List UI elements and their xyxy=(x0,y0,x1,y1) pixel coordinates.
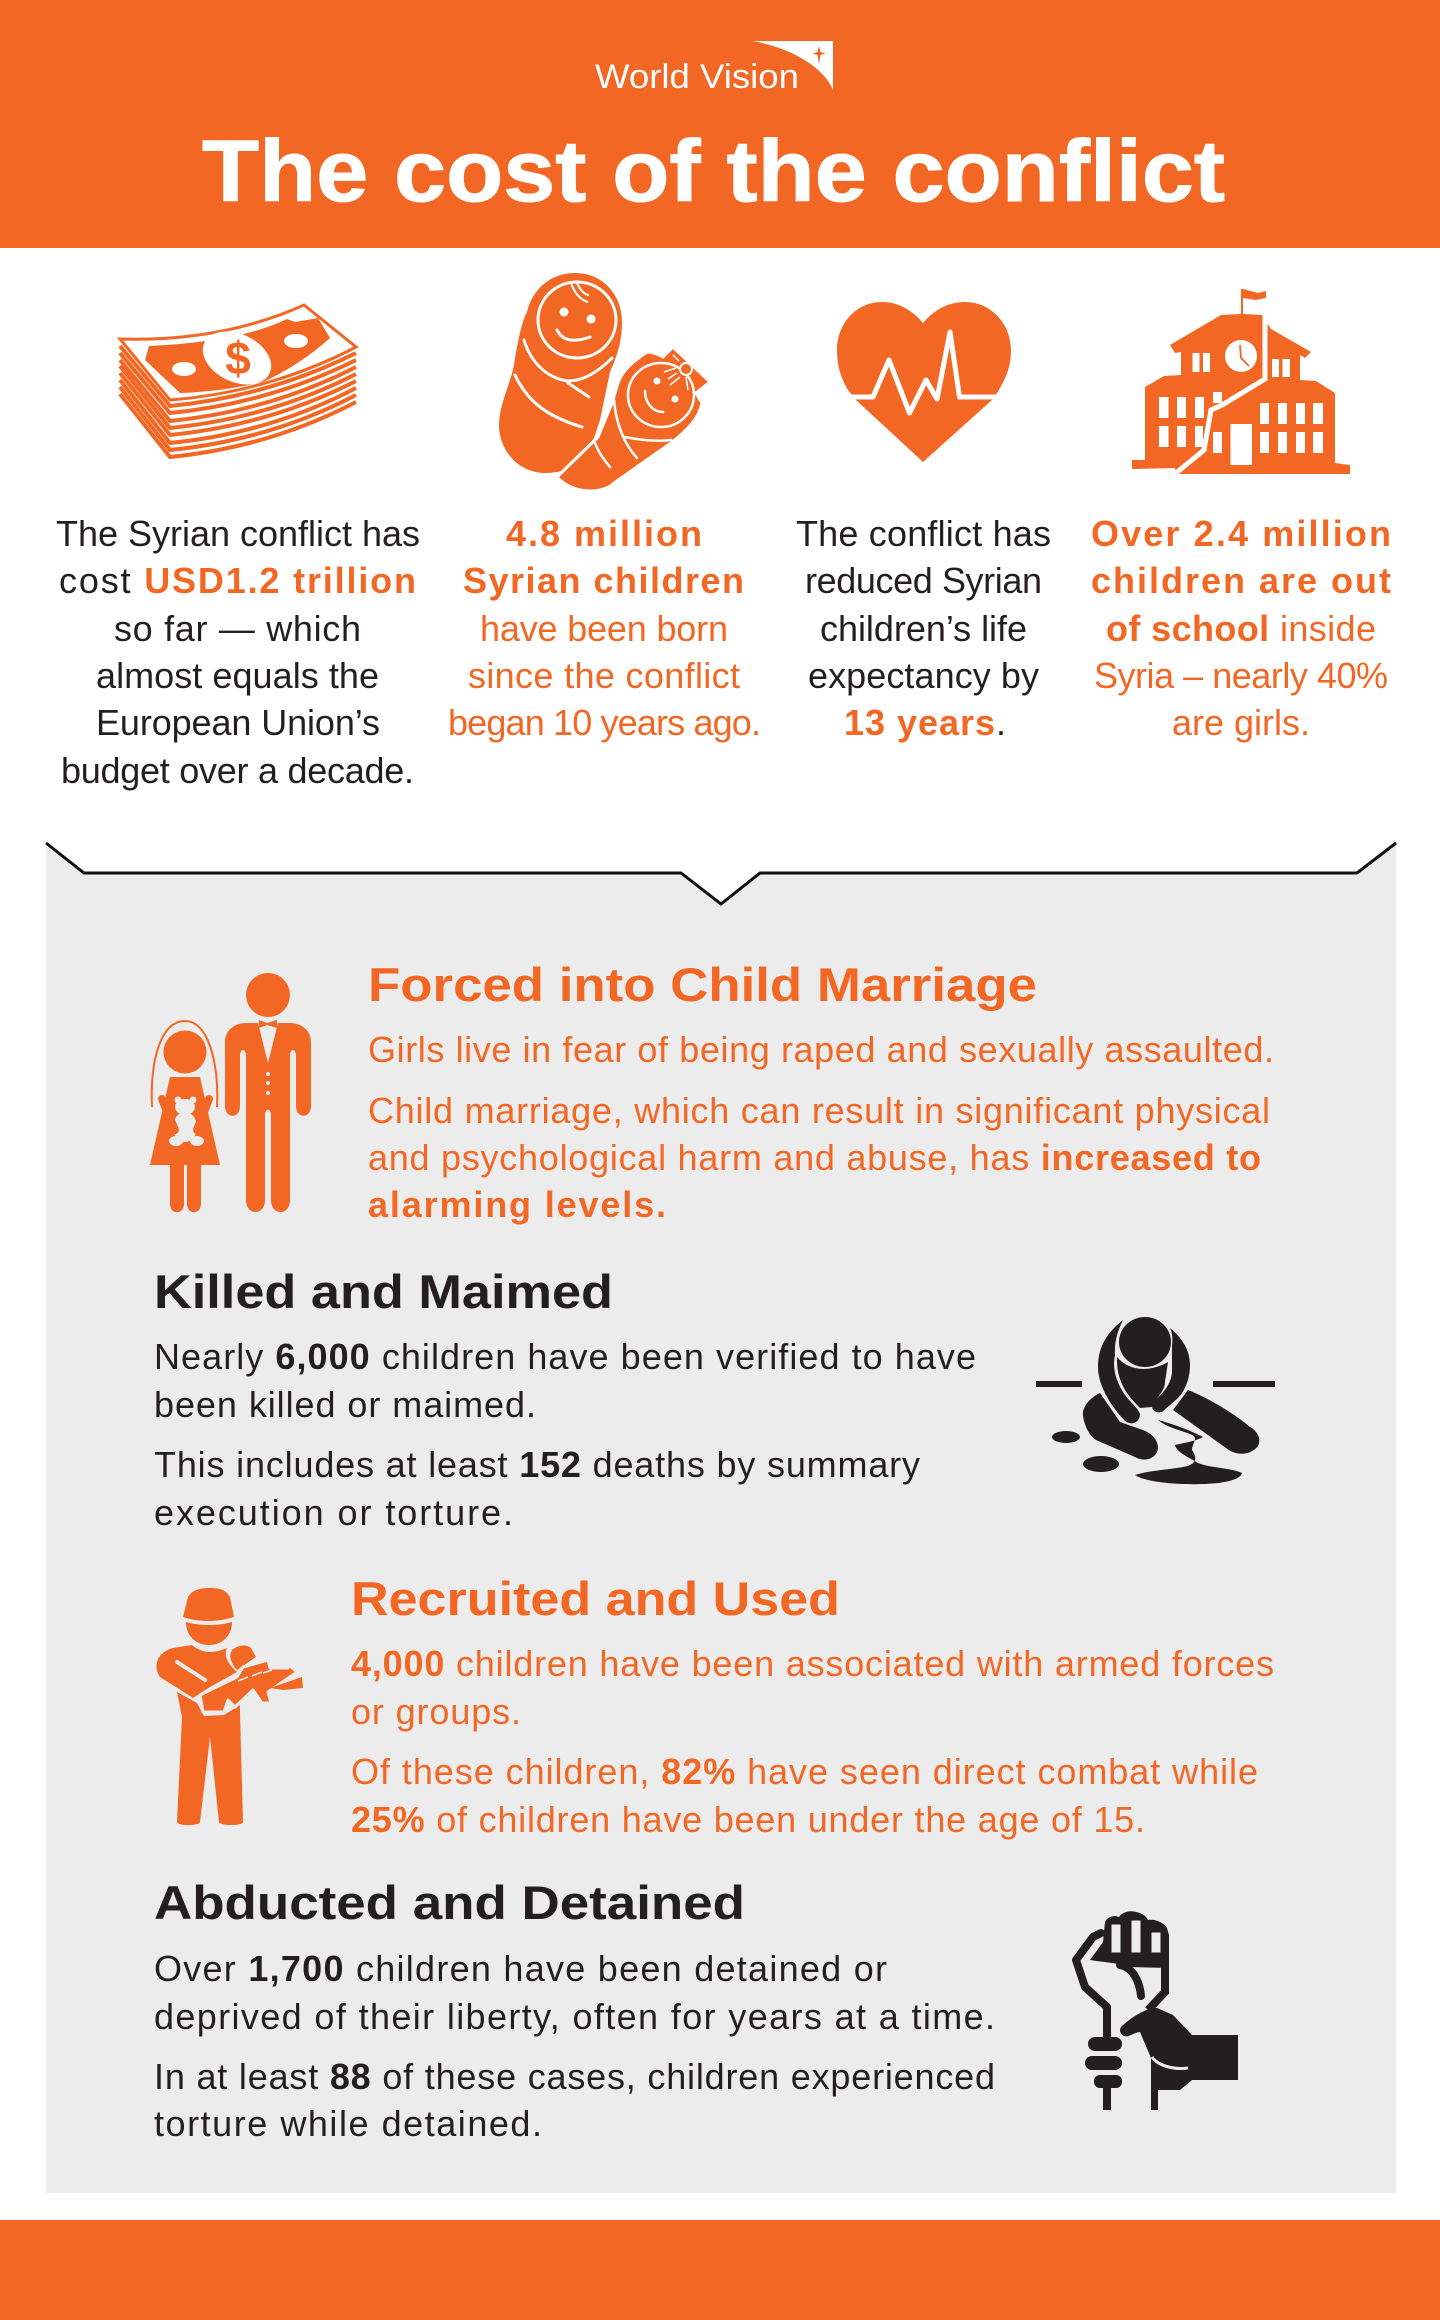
text block: alarming levels. xyxy=(368,1184,666,1225)
text block: execution or torture. xyxy=(154,1492,513,1533)
text block: children born: since the conflict xyxy=(468,655,740,696)
title: The cost of the conflict xyxy=(202,123,1225,220)
text block: or groups. xyxy=(351,1691,521,1732)
text block: deprived of their liberty, often for years at a time. xyxy=(154,1996,995,2037)
icon: heart with pulse line xyxy=(837,302,1011,462)
footer band xyxy=(0,2220,1440,2320)
stat: children born xyxy=(448,273,761,743)
text block: life expectancy xyxy=(796,513,1051,743)
heading: Recruited and Used xyxy=(351,1572,840,1625)
text block: out of school: Syria – nearly 40% xyxy=(1094,655,1388,696)
icon: stack of money xyxy=(120,305,356,457)
text block: torture while detained. xyxy=(154,2103,542,2144)
icon: child soldier with rifle xyxy=(156,1588,303,1825)
text block: out of school: are girls. xyxy=(1172,702,1310,743)
text block: 25% of children have been under the age of 15. xyxy=(351,1799,1145,1840)
heading: Forced into Child Marriage xyxy=(368,958,1037,1011)
text block xyxy=(154,1336,976,1533)
icon: child bride and groom xyxy=(150,973,311,1212)
section: killed and maimed xyxy=(154,1265,1275,1533)
text block: been killed or maimed. xyxy=(154,1384,536,1425)
icon: injured child with blood xyxy=(1036,1317,1275,1484)
text block: war cost: The Syrian conflict has xyxy=(56,513,420,554)
text block: war cost: almost equals the xyxy=(96,655,379,696)
text block: children born xyxy=(448,513,761,743)
text block: war cost: cost USD1.2 trillion xyxy=(59,560,416,601)
text block: Over 1,700 children have been detained or xyxy=(154,1948,887,1989)
text block: life expectancy: children’s life xyxy=(820,608,1027,649)
text block: 4,000 children have been associated with armed forces xyxy=(351,1643,1274,1684)
text block: and psychological harm and abuse, has increased to xyxy=(368,1137,1261,1178)
text block xyxy=(368,1029,1274,1225)
grey panel with notched top xyxy=(46,843,1396,2193)
text block: life expectancy: 13 years. xyxy=(844,702,1006,743)
logo: World Vision xyxy=(595,41,833,96)
stat: out of school xyxy=(1091,289,1391,743)
text block: war cost: budget over a decade. xyxy=(61,750,414,791)
text block: children born: 4.8 million xyxy=(506,513,702,554)
heading: Killed and Maimed xyxy=(154,1265,613,1318)
stat: war cost xyxy=(56,305,420,791)
text block: war cost: so far — which xyxy=(114,608,361,649)
header banner xyxy=(0,0,1440,248)
heading: Abducted and Detained xyxy=(154,1876,745,1929)
text block: Of these children, 82% have seen direct combat while xyxy=(351,1751,1258,1792)
text block: out of school: of school inside xyxy=(1106,608,1376,649)
logo: World Vision: World Vision xyxy=(595,58,799,96)
icon: damaged school building xyxy=(1132,289,1350,474)
text block xyxy=(154,1948,995,2144)
text block: life expectancy: reduced Syrian xyxy=(805,560,1042,601)
text block: out of school: Over 2.4 million xyxy=(1091,513,1391,554)
text block: war cost xyxy=(56,513,420,791)
section: forced into child marriage xyxy=(150,958,1274,1225)
text block: Child marriage, which can result in significant physical xyxy=(368,1090,1270,1131)
text block: In at least 88 of these cases, children experienced xyxy=(154,2056,995,2097)
section: recruited and used xyxy=(156,1572,1274,1840)
text block: war cost: European Union’s xyxy=(96,702,380,743)
icon: hand gripping raised fist xyxy=(1076,1911,1238,2110)
text block xyxy=(351,1643,1274,1840)
icon: swaddled babies xyxy=(499,273,710,491)
text block: out of school xyxy=(1091,513,1391,743)
stat: life expectancy xyxy=(796,302,1051,743)
text block: children born: began 10 years ago. xyxy=(448,702,761,743)
text block: children born: have been born xyxy=(480,608,728,649)
text block: Nearly 6,000 children have been verified to have xyxy=(154,1336,976,1377)
text block: life expectancy: The conflict has xyxy=(796,513,1051,554)
text block: life expectancy: expectancy by xyxy=(808,655,1039,696)
section: abducted and detained xyxy=(154,1876,1238,2144)
text block: Girls live in fear of being raped and sexually assaulted. xyxy=(368,1029,1274,1070)
text block: children born: Syrian children xyxy=(463,560,744,601)
icon: stack of money: $ xyxy=(225,332,251,384)
text block: out of school: children are out xyxy=(1091,560,1391,601)
text block: This includes at least 152 deaths by summary xyxy=(154,1444,920,1485)
